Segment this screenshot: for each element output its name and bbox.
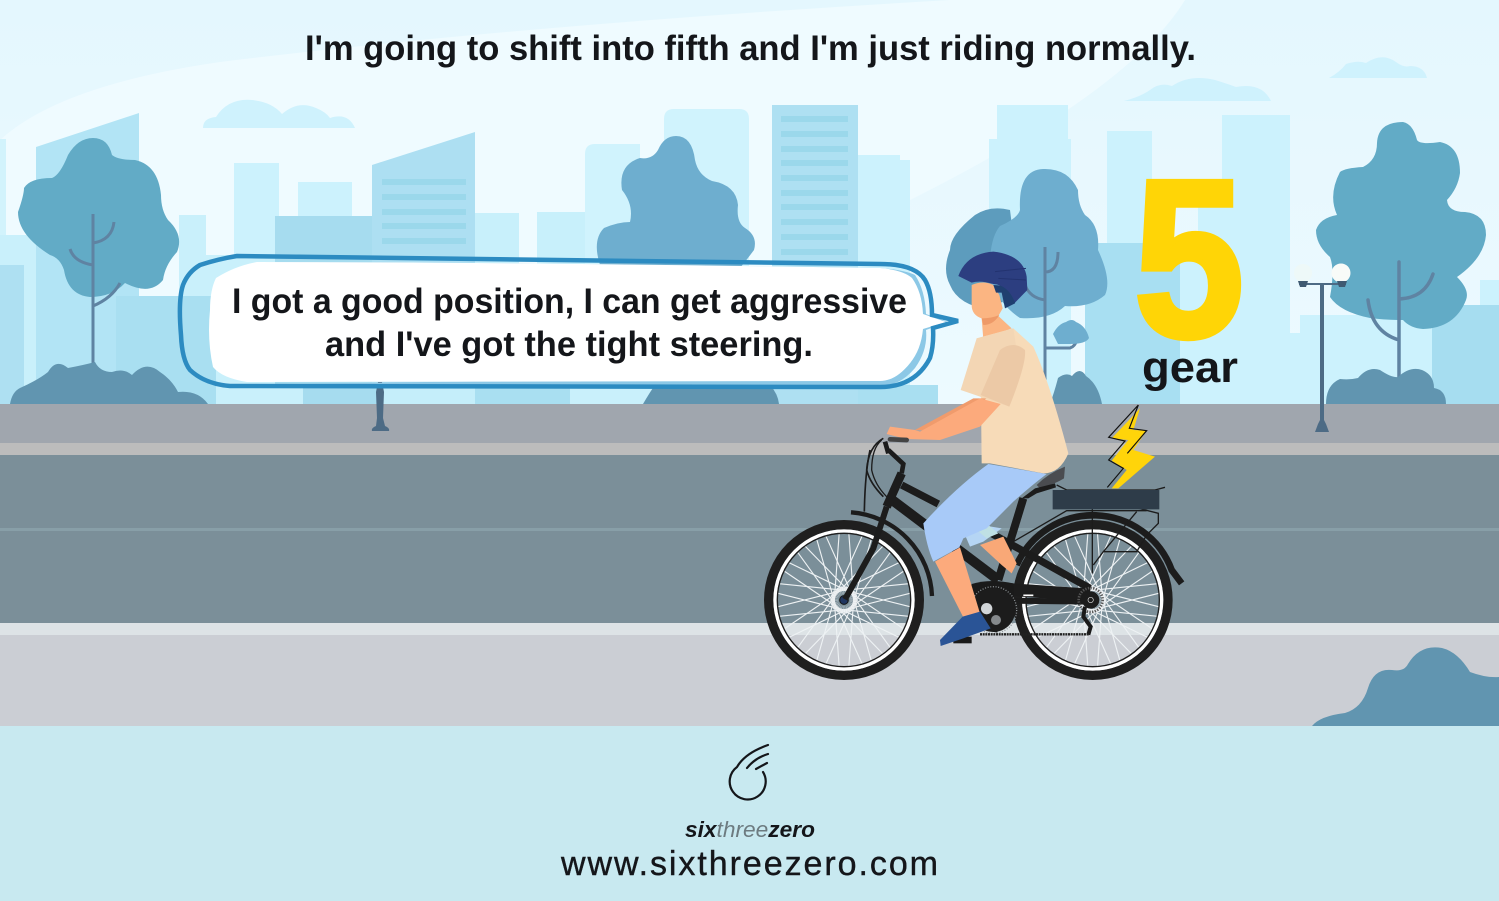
- sky background: [0, 0, 1499, 404]
- tree: right: [1316, 122, 1486, 404]
- rear rack: [1013, 485, 1165, 573]
- gear label: gear: [1142, 343, 1238, 392]
- gear number: 5: [1134, 134, 1244, 384]
- road: [0, 404, 1499, 726]
- rider shoe: [940, 612, 991, 646]
- street lamp: left: [372, 382, 389, 431]
- bubble text: I got a good position, I can get aggressive: [232, 282, 907, 321]
- rider shirt: [977, 328, 1068, 473]
- clouds: [203, 57, 1427, 128]
- bush: foreground: [1312, 647, 1499, 726]
- drivetrain: [953, 581, 1103, 643]
- bubble text: and I've got the tight steering.: [325, 325, 813, 364]
- logo icon: [730, 745, 768, 799]
- heading: I'm going to shift into fifth and I'm just riding normally.: [305, 29, 1196, 68]
- street lamp: right: [1294, 264, 1350, 432]
- brand name: sixthreezero: [685, 817, 815, 842]
- rear wheel: [1017, 525, 1168, 675]
- lightning bolt: [1107, 405, 1155, 488]
- speech bubble: [180, 256, 958, 387]
- rider shorts back: [965, 525, 1002, 547]
- city skyline: [0, 105, 1499, 404]
- cyclist and e-bike: [769, 252, 1182, 675]
- tree: centre: [597, 136, 779, 404]
- rider sleeve: [961, 328, 1025, 407]
- mudguards: [851, 512, 1182, 596]
- rider helmet: [958, 252, 1027, 308]
- rider neck and head: [972, 282, 1012, 339]
- rider arm: [887, 398, 1001, 440]
- rider back leg: [980, 537, 1017, 573]
- bottom band: [0, 726, 1499, 901]
- battery: [1053, 490, 1159, 509]
- website url: www.sixthreezero.com: [560, 845, 938, 883]
- saddle: [1022, 467, 1065, 498]
- tree: right centre: [946, 169, 1107, 404]
- rider shorts: [923, 464, 1047, 562]
- front wheel: [769, 525, 919, 675]
- rider leg: [935, 547, 980, 617]
- tree: left: [10, 138, 208, 404]
- bubble text: [232, 282, 907, 364]
- frame: [845, 438, 1090, 602]
- handlebar grip: [890, 432, 907, 447]
